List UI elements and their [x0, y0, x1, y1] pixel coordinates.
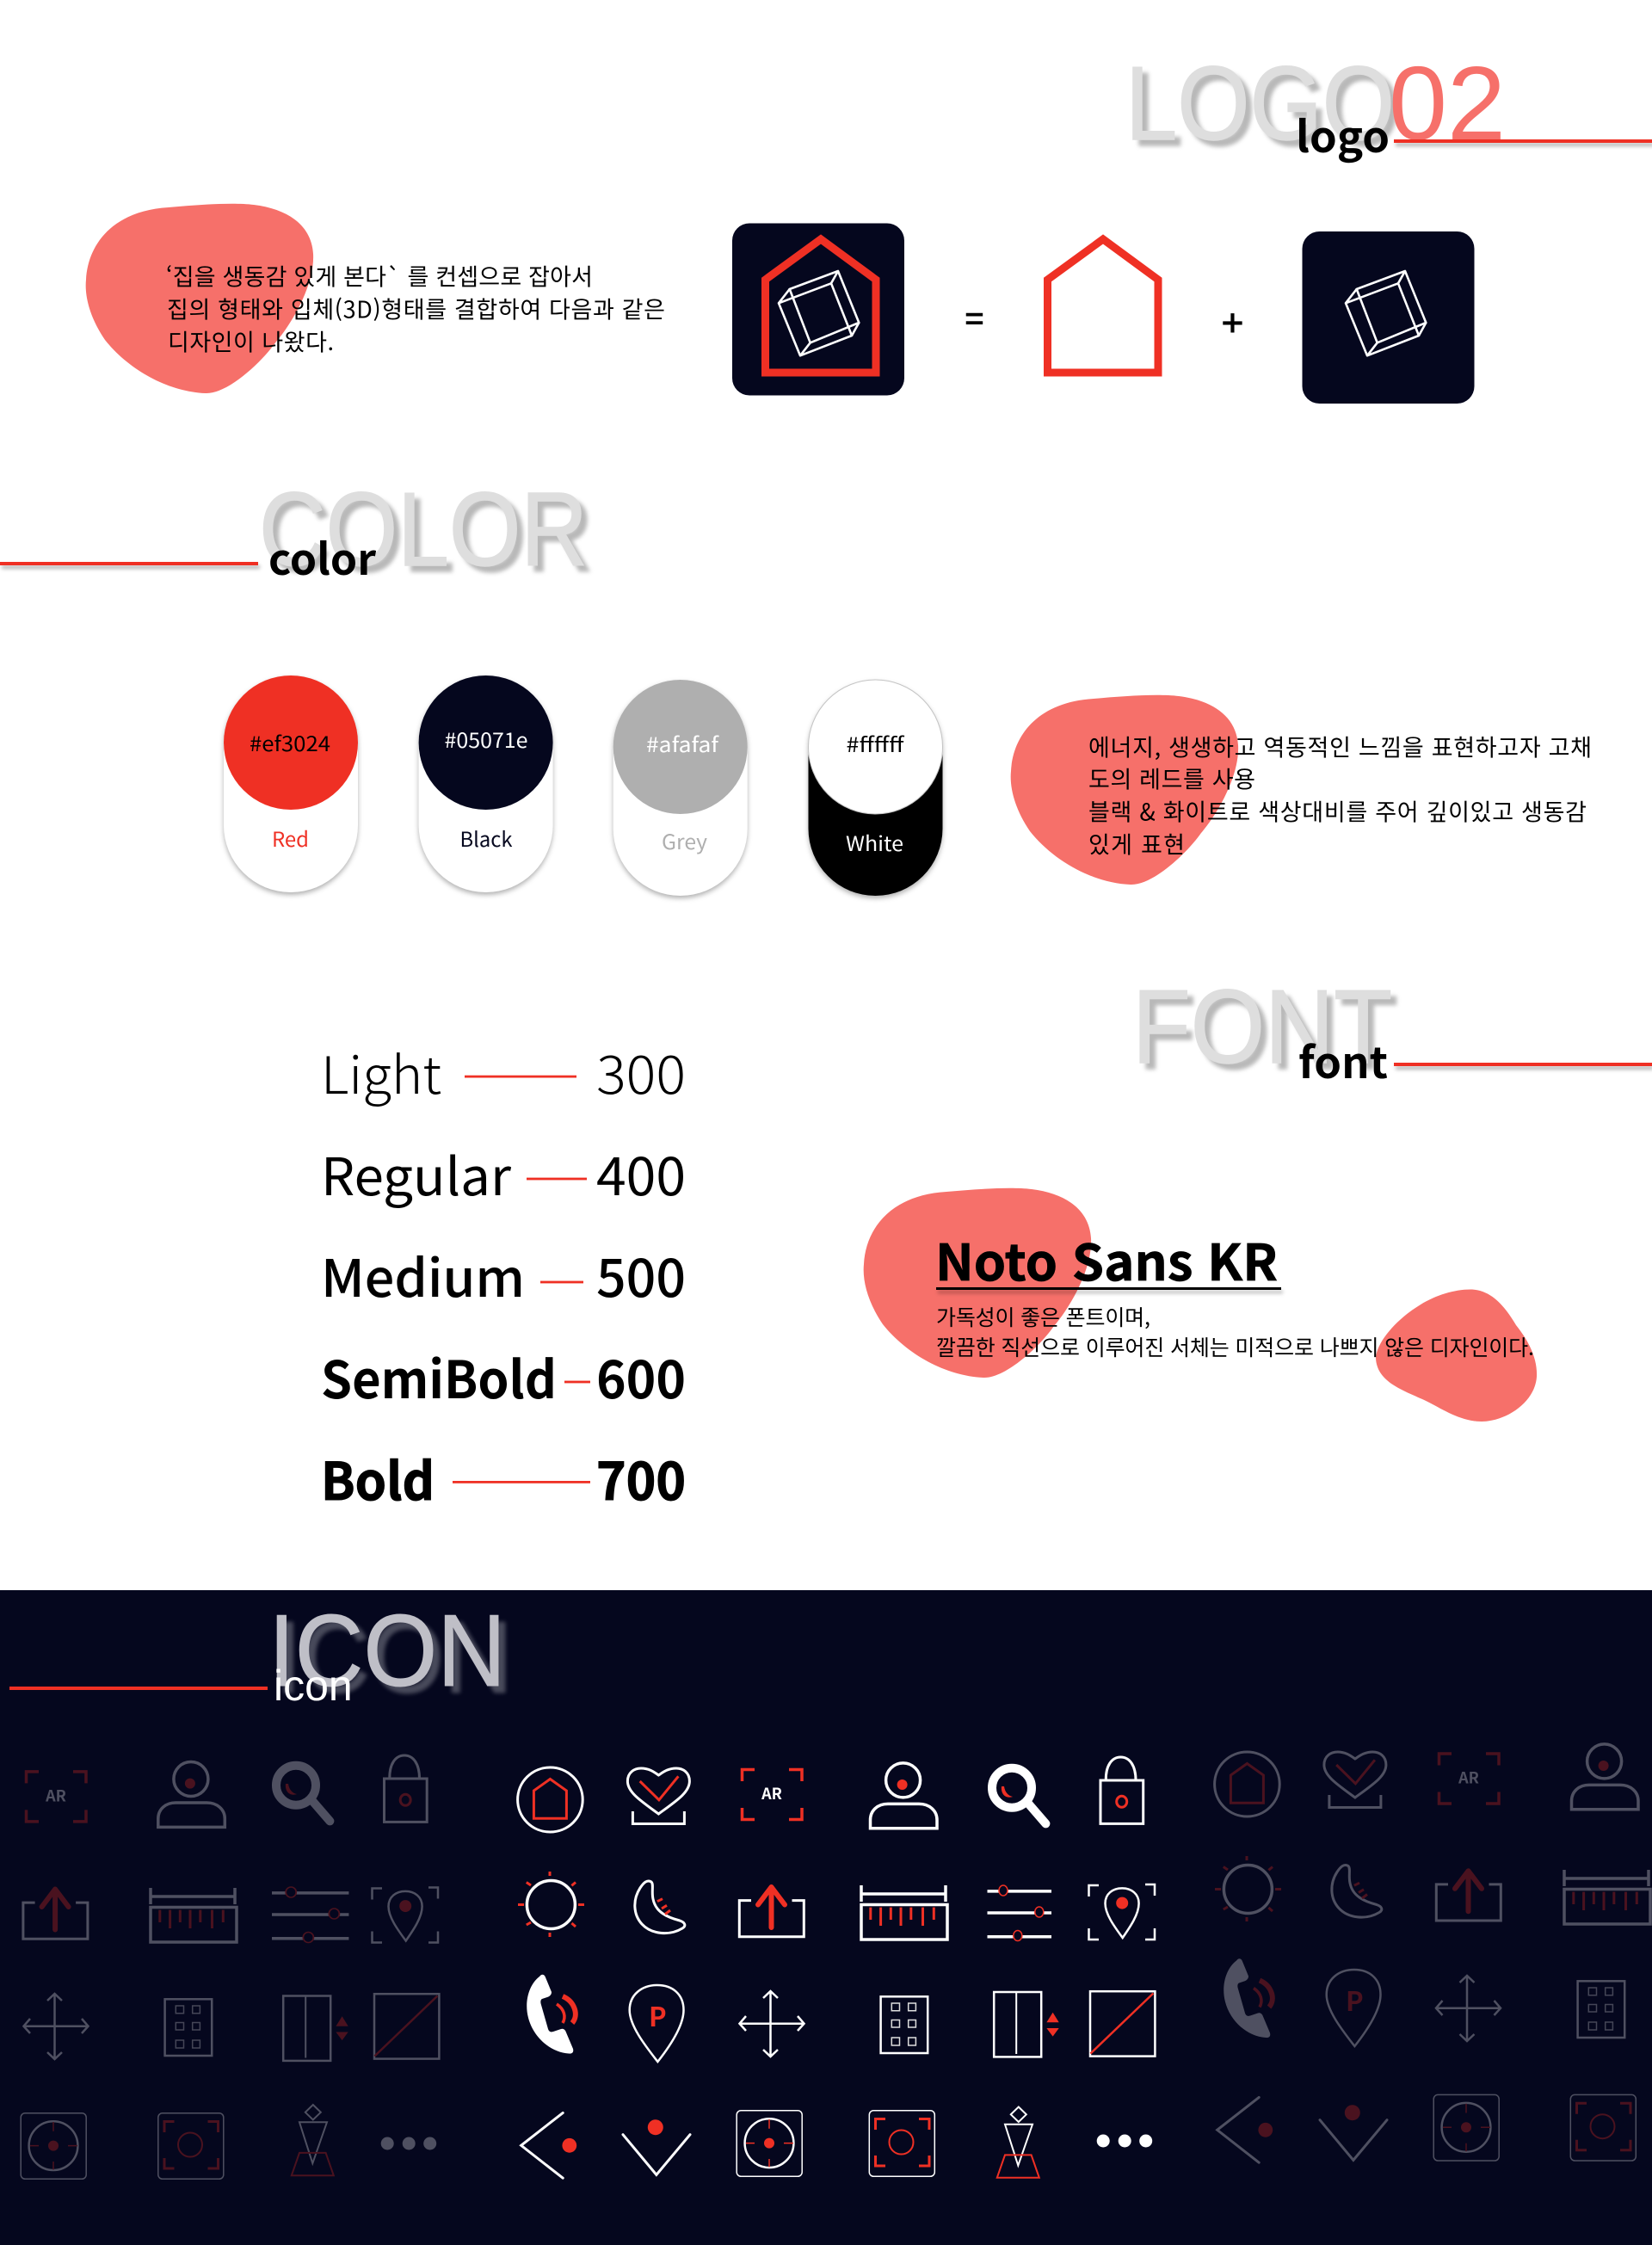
logo part: cube on dark	[1303, 231, 1475, 404]
icon: home	[518, 1767, 583, 1832]
logo mark: house and cube	[732, 224, 904, 396]
weight: regular	[321, 1136, 686, 1211]
icon: pin frame	[372, 1888, 438, 1943]
icon: ruler	[151, 1888, 237, 1942]
heading: FONT: FONT	[1132, 968, 1392, 1085]
coral blob left	[864, 1188, 1091, 1378]
red heading rule	[1394, 139, 1652, 143]
icon: camera	[1570, 2094, 1636, 2161]
logo concept text	[166, 258, 665, 358]
icon: camera	[869, 2111, 934, 2176]
icon: AR: AR	[45, 1784, 66, 1806]
icon: person	[1571, 1744, 1638, 1810]
icon: move	[24, 1994, 88, 2059]
subheading: logo: logo	[1296, 103, 1390, 165]
icon set: left faded	[21, 1755, 439, 2179]
icon: upload	[739, 1887, 804, 1937]
icon: AR	[742, 1769, 802, 1819]
swatch: black: #05071e	[444, 724, 528, 754]
icon: lock	[1100, 1757, 1143, 1823]
icon: sliders	[988, 1885, 1051, 1941]
icon: back	[1217, 2097, 1273, 2162]
logo concept text: 디자인이 나왔다.	[168, 324, 334, 358]
icon: parking pin	[1327, 1970, 1380, 2046]
color concept text: 에너지, 생생하고 역동적인 느낌을 표현하고자 고채	[1088, 730, 1592, 762]
subheading: icon: icon	[274, 1662, 353, 1710]
icon: down	[1320, 2105, 1387, 2160]
icon: ruler	[861, 1885, 947, 1940]
icon: phone	[527, 1975, 576, 2054]
logo concept text: ‘집을 생동감 있게 본다` 를 컨셉으로 잡아서	[166, 258, 593, 293]
color concept text: 도의 레드를 사용	[1088, 761, 1255, 795]
weight: semibold: SemiBold	[321, 1339, 557, 1414]
weight: light	[321, 1034, 686, 1109]
coral blob	[1011, 695, 1238, 885]
icon: square	[374, 1994, 439, 2059]
equals sign: =	[965, 301, 984, 337]
icon: home	[1215, 1752, 1279, 1816]
subheading: font: font	[1298, 1029, 1388, 1091]
icon set: centre	[518, 1757, 1155, 2178]
heading: LOGO: LOGO	[1125, 45, 1395, 162]
swatch: red	[224, 675, 358, 892]
weight: medium	[321, 1237, 686, 1312]
red heading rule	[0, 562, 258, 565]
weight: bold	[321, 1440, 686, 1515]
icon: building	[165, 1999, 212, 2056]
swatch: black: Black	[459, 823, 513, 853]
icon: move	[740, 1991, 804, 2057]
icon: dots	[1097, 2134, 1152, 2148]
icon: upload	[23, 1890, 88, 1939]
icon: back	[521, 2112, 576, 2178]
plus sign: +	[1222, 302, 1243, 344]
coral blob	[86, 204, 313, 393]
weight: regular: 400	[596, 1136, 686, 1211]
icon: target	[737, 2111, 802, 2176]
weight: bold: Bold	[321, 1440, 435, 1515]
weight: medium: Medium	[321, 1237, 525, 1312]
icon: heart	[1324, 1752, 1386, 1807]
icon: AR	[1439, 1754, 1499, 1804]
section: color	[0, 471, 1592, 896]
icon: square	[1090, 1991, 1155, 2057]
swatch: red: #ef3024	[250, 727, 330, 757]
icon: phone	[1224, 1958, 1273, 2038]
weight: regular: Regular	[321, 1136, 512, 1211]
icon: target	[21, 2113, 86, 2179]
icon: magnifier	[276, 1766, 330, 1821]
red heading rule	[1394, 1063, 1652, 1066]
icon: ruler	[1564, 1870, 1650, 1924]
swatch: white: White	[846, 827, 903, 857]
color concept text: 있게 표현	[1088, 826, 1185, 860]
swatch: white	[809, 680, 943, 896]
icon: AR: AR	[761, 1782, 782, 1804]
icon set: right faded	[1215, 1744, 1650, 2162]
section: icon	[0, 1590, 1652, 2245]
icon: camera	[158, 2113, 224, 2179]
icon: sliders	[272, 1887, 348, 1943]
swatch: grey: Grey	[662, 825, 707, 855]
icon: sun	[1215, 1856, 1281, 1921]
section: logo	[86, 45, 1652, 404]
dark background panel	[0, 1590, 1652, 2245]
icon: parking pin: P	[649, 1995, 667, 2034]
font weight list	[321, 1034, 686, 1515]
swatch: grey	[613, 680, 748, 896]
coral blob right	[1376, 1289, 1537, 1422]
icon: pin frame	[1089, 1884, 1155, 1940]
weight: bold: 700	[596, 1440, 686, 1515]
icon: dots	[381, 2137, 436, 2149]
weight: semibold: 600	[596, 1339, 686, 1414]
font description	[936, 1301, 1534, 1362]
icon: upload	[1436, 1871, 1501, 1921]
swatch: black	[419, 675, 553, 892]
icon: moon	[635, 1881, 685, 1934]
color concept text	[1088, 730, 1592, 860]
swatch: red: Red	[272, 823, 309, 853]
icon: building	[1578, 1981, 1624, 2038]
icon: figure	[292, 2105, 334, 2175]
swatch: grey: #afafaf	[646, 728, 719, 758]
icon: AR	[26, 1772, 86, 1822]
icon: moon	[1332, 1865, 1382, 1917]
icon: elevator	[283, 1996, 348, 2061]
subheading: color: color	[268, 526, 376, 588]
icon: person	[158, 1761, 225, 1827]
heading: COLOR: COLOR	[259, 471, 588, 588]
icon: figure	[997, 2106, 1039, 2178]
icon: person	[871, 1763, 937, 1829]
icon: heart	[627, 1768, 689, 1824]
icon: elevator	[994, 1992, 1059, 2057]
icon: down	[623, 2119, 690, 2174]
weight: semibold	[321, 1339, 686, 1414]
logo part: house	[1048, 239, 1158, 373]
font description: 가독성이 좋은 폰트이며,	[936, 1301, 1150, 1332]
red heading rule	[9, 1687, 268, 1690]
icon: parking pin	[630, 1985, 683, 2062]
swatch: white: #ffffff	[847, 728, 905, 758]
font name: Noto Sans KR: Noto Sans KR	[935, 1223, 1278, 1295]
icon: lock	[384, 1755, 427, 1822]
weight: medium: 500	[596, 1237, 686, 1312]
icon: parking pin: P	[1346, 1980, 1364, 2019]
weight: light: Light	[321, 1034, 441, 1109]
section: font	[321, 968, 1652, 1515]
logo concept text: 집의 형태와 입체(3D)형태를 결합하여 다음과 같은	[167, 291, 665, 325]
font description: 깔끔한 직선으로 이루어진 서체는 미적으로 나쁘지 않은 디자인이다.	[936, 1331, 1534, 1362]
heading: ICON: ICON	[268, 1594, 506, 1708]
color concept text: 블랙 & 화이트로 색상대비를 주어 깊이있고 생동감	[1088, 793, 1587, 828]
page number 02: 02	[1389, 45, 1506, 162]
icon: magnifier	[992, 1768, 1045, 1823]
icon: move	[1436, 1976, 1501, 2041]
underline	[936, 1287, 1281, 1290]
icon: building	[881, 1996, 928, 2053]
icon: sun	[518, 1872, 584, 1937]
weight: light: 300	[596, 1034, 686, 1109]
icon: AR: AR	[1458, 1766, 1479, 1788]
icon: target	[1433, 2094, 1499, 2161]
